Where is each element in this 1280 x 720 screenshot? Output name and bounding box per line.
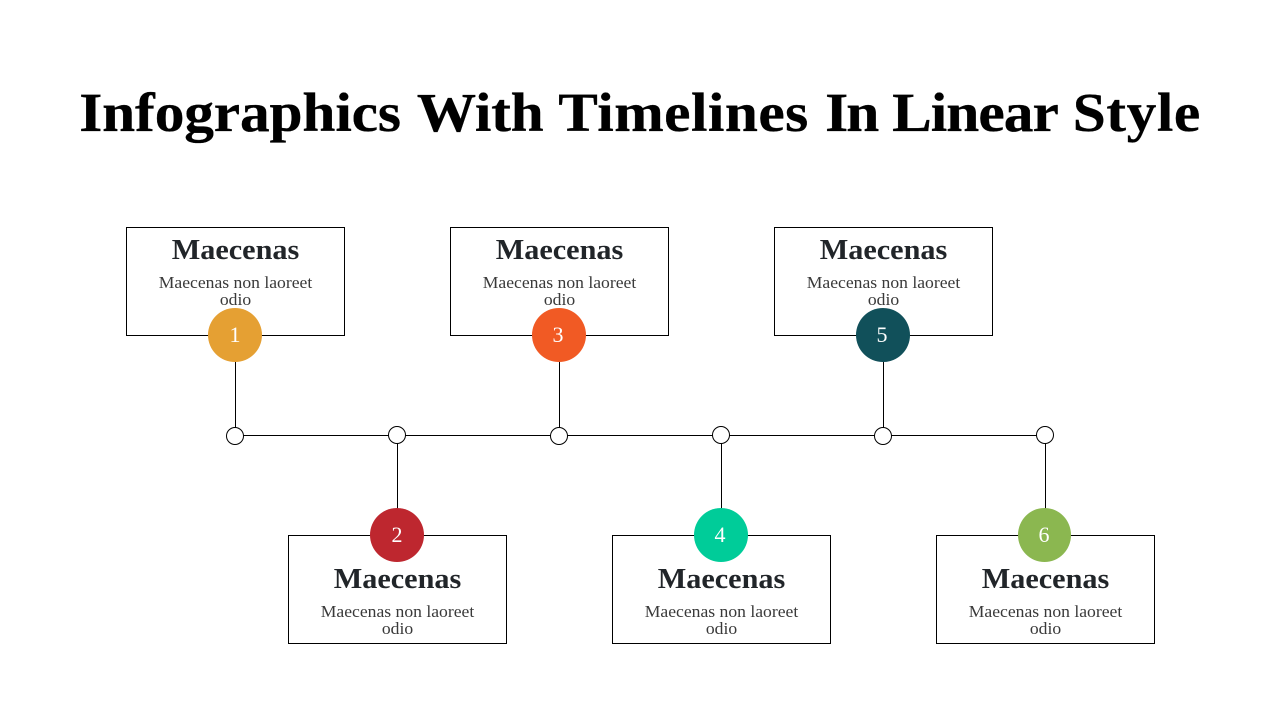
timeline node 5: [874, 427, 892, 445]
connector 4: [721, 436, 722, 511]
number circle 4: [694, 508, 748, 562]
number circle 1: [208, 308, 262, 362]
number circle 1: 1: [230, 322, 240, 347]
card 6: odio: [1030, 619, 1061, 638]
number circle 4: 4: [714, 522, 726, 547]
card 4: odio: [706, 619, 737, 638]
card 1: Maecenas non laoreet: [159, 273, 312, 292]
timeline node 6: [1036, 426, 1054, 444]
timeline node 1: [226, 427, 244, 445]
card 3: Maecenas non laoreet: [483, 273, 636, 292]
number circle 2: 2: [392, 522, 402, 547]
card 6: Maecenas non laoreet: [969, 602, 1122, 621]
timeline axis: [235, 435, 1045, 436]
card 3: Maecenas: [496, 234, 623, 266]
card 6: Maecenas: [982, 563, 1109, 595]
card 1: [126, 227, 345, 336]
connector 3: [559, 360, 560, 435]
card 4: [612, 535, 831, 644]
card 1: odio: [220, 290, 251, 309]
card 4: Maecenas: [658, 563, 785, 595]
number circle 5: 5: [876, 322, 888, 347]
card 5: odio: [868, 290, 899, 309]
number circle 5: [856, 308, 910, 362]
number circle 6: [1018, 508, 1071, 562]
card 4: Maecenas non laoreet: [645, 602, 798, 621]
connector 6: [1045, 436, 1046, 511]
timeline node 3: [550, 427, 568, 445]
card 2: odio: [382, 619, 413, 638]
number circle 3: 3: [552, 322, 564, 347]
connector 1: [235, 360, 236, 435]
timeline node 4: [712, 426, 730, 444]
card 3: [450, 227, 669, 336]
title: Infographics With Timelines In Linear Style: [79, 82, 1201, 143]
number circle 2: [370, 508, 424, 562]
card 5: Maecenas: [820, 234, 947, 266]
card 2: Maecenas: [334, 563, 461, 595]
card 2: [288, 535, 507, 644]
number circle 6: 6: [1038, 522, 1050, 547]
card 5: [774, 227, 993, 336]
card 5: Maecenas non laoreet: [807, 273, 960, 292]
card 6: [936, 535, 1155, 644]
connector 2: [397, 436, 398, 511]
connector 5: [883, 360, 884, 435]
number circle 3: [532, 308, 586, 362]
timeline node 2: [388, 426, 406, 444]
card 2: Maecenas non laoreet: [321, 602, 474, 621]
card 1: Maecenas: [172, 234, 299, 266]
card 3: odio: [544, 290, 575, 309]
